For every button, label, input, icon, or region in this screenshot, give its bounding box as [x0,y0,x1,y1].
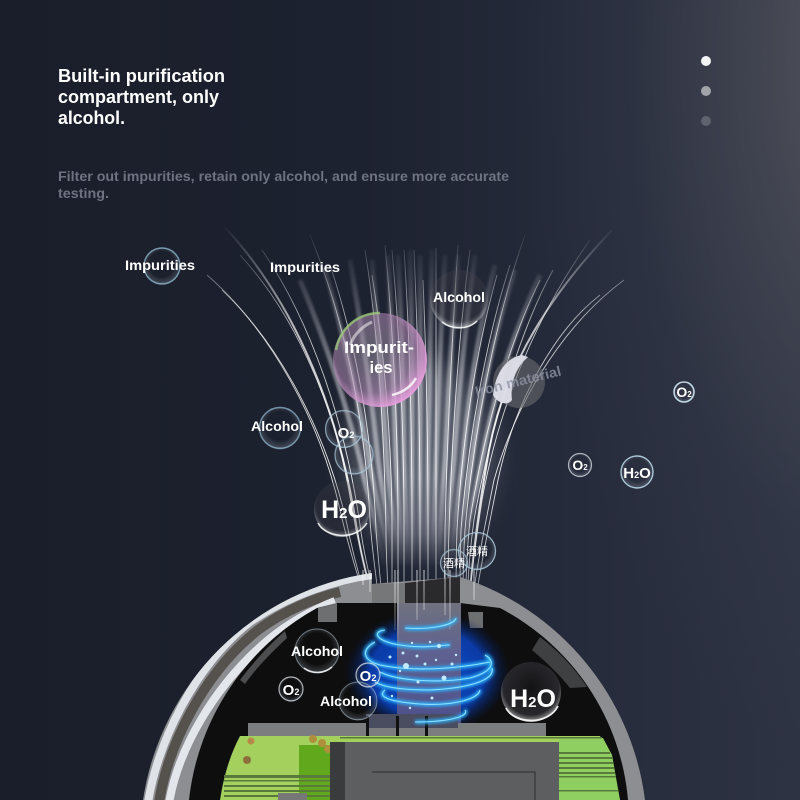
bubble: iron material: Iron material [473,363,563,399]
inner cavity [189,603,628,800]
bubble: O2 far right [674,382,694,402]
label: Impurities: Impurities [270,259,340,275]
bubble: Impurities pink [333,313,427,407]
bubble: Alcohol top [430,270,488,328]
heading: compartment, only [58,87,219,107]
bubble: Alcohol inside upper [291,629,343,673]
bubble: Impurities pink: Impurit- [344,338,414,357]
bubble: alcohol Chinese pair: 酒精 [443,557,465,570]
bubble: O2 far right: O2 [676,384,692,400]
bubble: alcohol Chinese pair: 酒精 [466,545,488,558]
bubble: Alcohol inside lower: Alcohol [320,693,372,709]
streaks over device top [363,570,474,650]
bubble: O2 right: O2 [572,457,588,473]
bubble: iron material [473,355,563,408]
light streaks fan [207,222,624,600]
bubble: O2 pair [326,410,373,474]
blue spiral [365,618,492,722]
bubble: O2 inside centre [356,663,380,687]
bubble: Impurities left [125,248,195,284]
heading: alcohol. [58,108,125,128]
bubble: O2 inside left [279,677,303,701]
bubble: Alcohol inside lower [320,682,377,720]
lower grey block [248,714,546,738]
subtitle text: Filter out impurities, retain only alcohol, and ensure more accurate [58,168,509,184]
device cross-section [143,573,645,800]
bubble: H2O inside: H2O [510,685,556,713]
bubble: H2O right [621,456,653,488]
chip [330,742,559,800]
bubble: Impurities left: Impurities [125,257,195,273]
filter cylinder [397,603,461,727]
circuit board [220,735,620,800]
bubble: H2O upper: H2O [321,496,367,524]
bubble: Alcohol left [251,408,303,448]
pagination dots [701,56,711,126]
bubble: H2O right: H2O [623,465,651,482]
bubble: O2 right [568,454,592,476]
subtitle text [58,168,509,201]
bubble: H2O inside [501,662,561,722]
bubble: Alcohol left: Alcohol [251,418,303,434]
top notch [372,577,460,603]
bubble: Alcohol top: Alcohol [433,289,485,305]
heading: Built-in purification [58,66,225,86]
blue glow [345,610,510,735]
heading [58,66,225,128]
bubble: H2O upper [314,481,370,537]
bubble: alcohol Chinese pair [440,532,496,576]
bubble: O2 pair: O2 [338,425,354,442]
cavity grey brackets [318,603,483,628]
bubble: Alcohol inside upper: Alcohol [291,643,343,659]
shell highlight stripes [147,575,372,800]
bubble: O2 inside left: O2 [283,682,299,699]
bubble: O2 inside centre: O2 [360,668,376,685]
bubble: Impurities pink: ies [370,358,392,377]
outer shell [143,573,645,800]
subtitle text: testing. [58,185,109,201]
